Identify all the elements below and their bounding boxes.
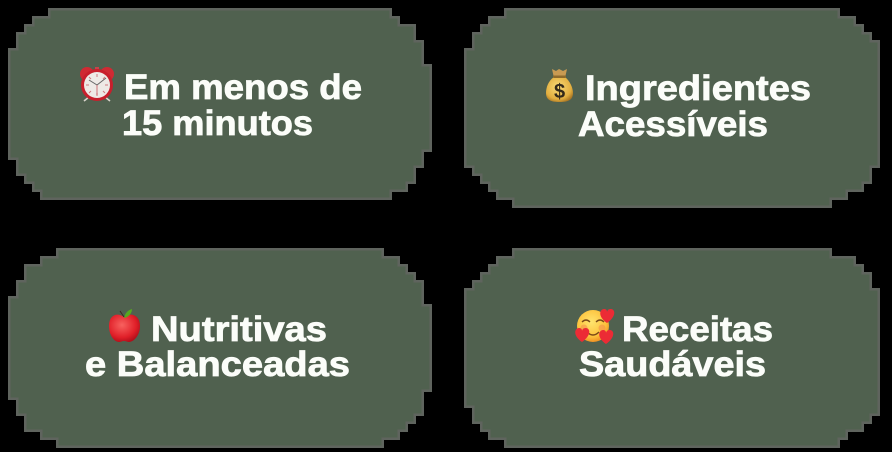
heading line: Ingredientes: Ingredientes [585,69,811,108]
icon: money bag: $ [554,81,565,103]
icon: smiling face with hearts [575,309,614,344]
heading line: Em menos de: Em menos de [124,68,362,107]
panel background [464,248,880,448]
heading line: 15 minutos: 15 minutos [122,104,313,143]
panel background [8,248,432,448]
icon: alarm clock [80,67,114,101]
panel: nutritivas e balanceadas [8,248,432,448]
heading line: Receitas: Receitas [622,310,773,349]
heading line: Nutritivas: Nutritivas [151,310,327,349]
icon: red apple [109,309,140,342]
heading line: e Balanceadas: e Balanceadas [85,345,350,384]
panel: em menos de 15 minutos [8,8,432,200]
heading line: Acessíveis: Acessíveis [578,105,768,144]
panel: ingredientes acessíveis [464,8,880,208]
icon: money bag [546,69,573,103]
panel: receitas saudáveis [464,248,880,448]
panel background [464,8,880,208]
heading line: Saudáveis: Saudáveis [579,345,766,384]
panel background [8,8,432,200]
